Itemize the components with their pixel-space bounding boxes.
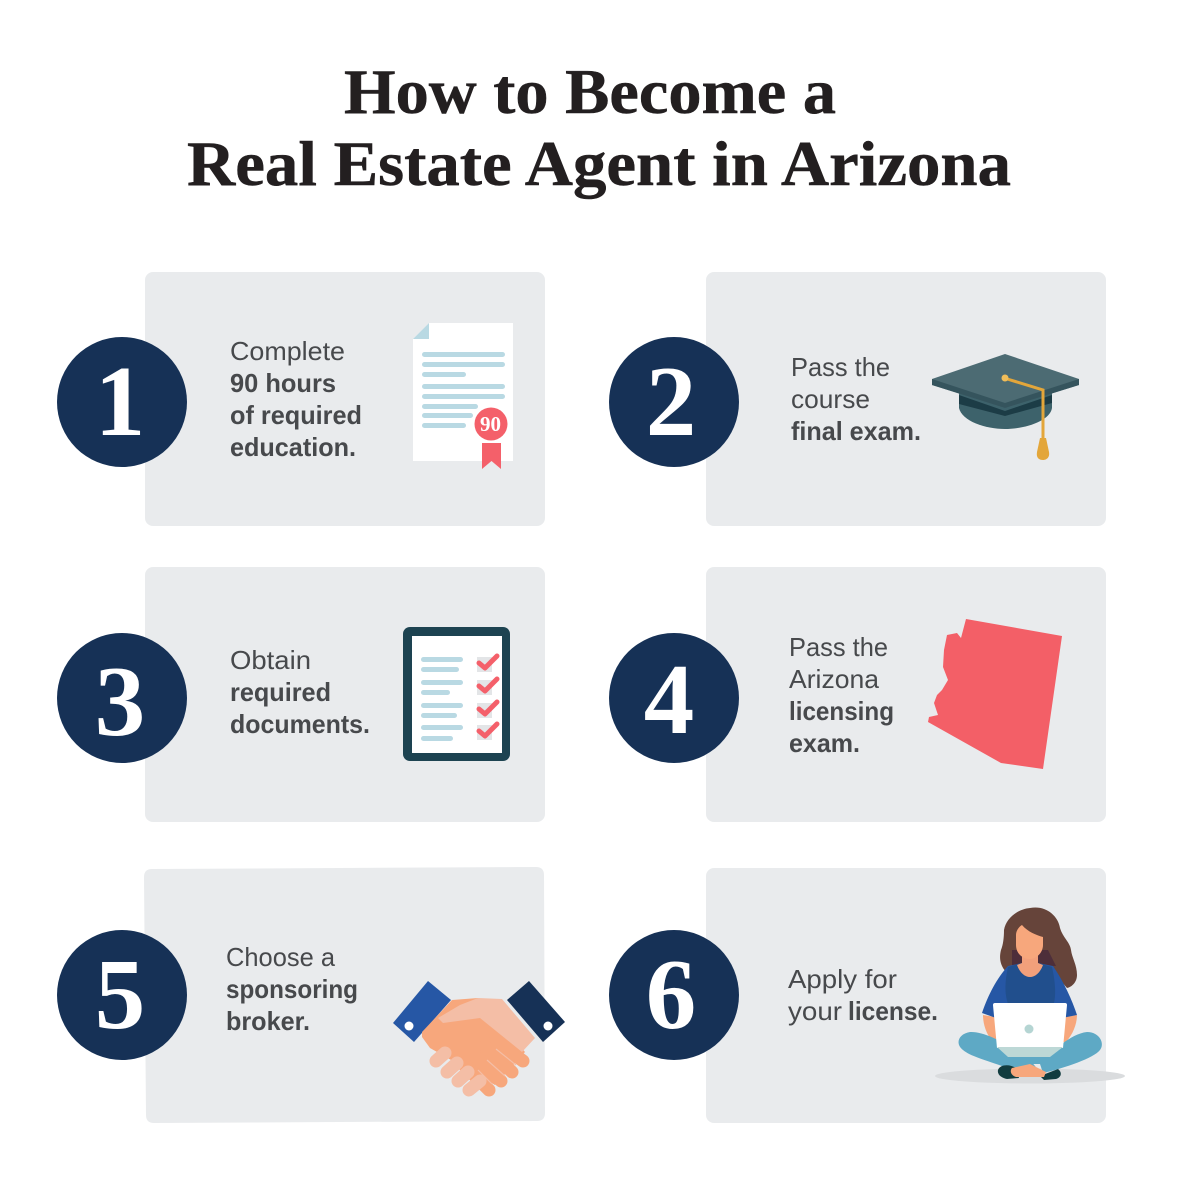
step 6 number badge xyxy=(609,930,739,1060)
step 1 text xyxy=(230,336,362,462)
icon: certificate document with 90 seal xyxy=(413,323,513,469)
title: How to Become a xyxy=(344,57,836,127)
step 3 text: required xyxy=(230,677,331,707)
panel: step 6 xyxy=(609,868,1125,1123)
icon: handshake xyxy=(393,981,565,1090)
step 4 text: exam. xyxy=(789,728,860,758)
step 2 text: Pass the xyxy=(791,352,890,382)
step 1 text: education. xyxy=(230,432,356,462)
step 6 text xyxy=(788,964,938,1026)
step 1 text: of required xyxy=(230,400,362,430)
icon: checklist xyxy=(403,627,510,761)
title: Real Estate Agent in Arizona xyxy=(187,129,1011,199)
icon: woman with laptop xyxy=(935,907,1125,1084)
step 3 text xyxy=(230,645,370,739)
step 2 text: course xyxy=(791,384,870,414)
step 1 number badge xyxy=(57,337,187,467)
step 5 number badge: 5 xyxy=(95,938,145,1050)
step 6 text: Apply for xyxy=(788,964,897,994)
panel: step 4 xyxy=(609,567,1106,822)
icon: certificate document with 90 seal: 90 xyxy=(480,412,501,436)
step 3 number badge xyxy=(57,633,187,763)
panel: step 3 xyxy=(57,567,545,822)
icon: Arizona state map xyxy=(928,619,1062,769)
step 2 text: final exam. xyxy=(791,416,921,446)
step 4 text: Arizona xyxy=(789,664,880,694)
panel: step 1 xyxy=(57,272,545,526)
step 6 text: your xyxy=(788,996,842,1026)
step 3 number badge: 3 xyxy=(95,645,145,757)
step 4 number badge: 4 xyxy=(644,643,694,755)
icon: graduation cap xyxy=(932,354,1079,460)
title xyxy=(187,57,1011,199)
step 1 text: Complete xyxy=(230,336,345,366)
step 5 text: sponsoring xyxy=(226,974,358,1004)
step 5 text xyxy=(226,942,358,1036)
step 5 text: broker. xyxy=(226,1006,310,1036)
step 4 text: Pass the xyxy=(789,632,888,662)
step 3 text: Obtain xyxy=(230,645,311,675)
step 1 number badge: 1 xyxy=(95,345,145,457)
step 2 number badge: 2 xyxy=(646,345,696,457)
step 2 number badge xyxy=(609,337,739,467)
panel: step 2 xyxy=(609,272,1106,526)
step 5 number badge xyxy=(57,930,187,1060)
step 2 text xyxy=(791,352,921,446)
step 6 number badge: 6 xyxy=(646,938,696,1050)
step 5 text: Choose a xyxy=(226,942,336,972)
step 1 text: 90 hours xyxy=(230,368,336,398)
step 4 text: licensing xyxy=(789,696,894,726)
panel: step 5 xyxy=(57,867,565,1123)
step 6 text: license. xyxy=(848,996,938,1026)
step 4 text xyxy=(789,632,894,758)
step 4 number badge xyxy=(609,633,739,763)
step 3 text: documents. xyxy=(230,709,370,739)
